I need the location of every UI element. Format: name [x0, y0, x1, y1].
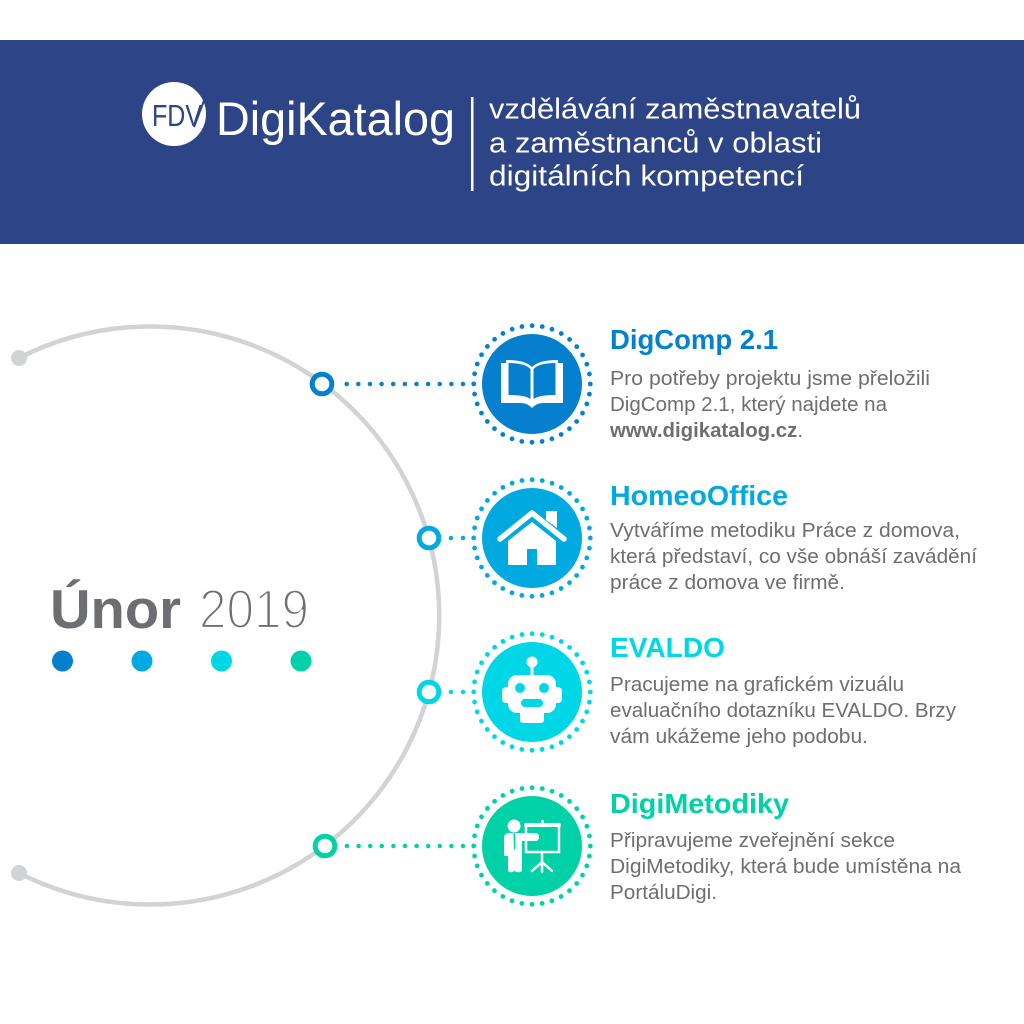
item: DigComp 2.1	[312, 324, 930, 442]
text: HomeoOffice	[610, 480, 977, 594]
header tagline: vzdělávání zaměstnavatelů	[489, 94, 861, 126]
text: DigComp 2.1: Pro potřeby projektu jsme přeložili	[610, 368, 930, 390]
text: EVALDO: vám ukážeme jeho podobu.	[610, 726, 868, 748]
item: HomeoOffice	[419, 480, 977, 596]
text: EVALDO: EVALDO	[610, 632, 725, 663]
icon: robot	[474, 634, 590, 750]
connector 1	[312, 374, 464, 394]
icon: house	[474, 480, 590, 596]
header tagline: digitálních kompetencí	[489, 160, 804, 192]
logo: FDV circle: FDV	[152, 98, 202, 133]
month heading	[50, 578, 309, 640]
text: HomeoOffice: Vytváříme metodiku Práce z domova,	[610, 520, 960, 542]
item: DigiMetodiky	[315, 788, 962, 904]
text: DigiMetodiky: DigiMetodiky, která bude umístěna na	[610, 856, 962, 878]
text: DigiMetodiky	[610, 788, 962, 904]
text: DigComp 2.1: DigComp 2.1	[610, 324, 778, 355]
large timeline arc	[11, 326, 439, 905]
connector 3	[419, 682, 464, 702]
text: EVALDO: Pracujeme na grafickém vizuálu	[610, 674, 904, 696]
month heading: 2019	[199, 578, 309, 640]
header band	[0, 40, 1024, 244]
text: DigiMetodiky: DigiMetodiky	[610, 788, 790, 819]
text: HomeoOffice: práce z domova ve firmě.	[610, 572, 845, 594]
logo: FDV circle	[142, 82, 206, 146]
text: HomeoOffice: HomeoOffice	[610, 480, 788, 511]
icon: presenter at board	[474, 788, 590, 904]
text: DigComp 2.1	[609, 324, 930, 442]
connector 4	[315, 836, 464, 856]
text: EVALDO	[610, 632, 956, 748]
icon: book	[474, 326, 590, 442]
text: DigComp 2.1: DigComp 2.1, který najdete na	[610, 394, 888, 416]
text: HomeoOffice: která představí, co vše obnáší zavádění	[610, 546, 977, 568]
text: DigiMetodiky: PortáluDigi.	[610, 882, 717, 904]
item: EVALDO	[419, 632, 956, 750]
month heading: Únor	[50, 578, 181, 640]
legend dots	[52, 650, 312, 672]
logo wordmark: DigiKatalog	[216, 92, 455, 145]
connector 2	[419, 528, 464, 548]
text: DigComp 2.1: www.digikatalog.cz.	[609, 420, 803, 442]
text: DigiMetodiky: Připravujeme zveřejnění sekce	[610, 830, 895, 852]
text: EVALDO: evaluačního dotazníku EVALDO. Brzy	[610, 700, 956, 722]
header tagline: a zaměstnanců v oblasti	[489, 128, 822, 160]
header tagline	[489, 94, 861, 192]
